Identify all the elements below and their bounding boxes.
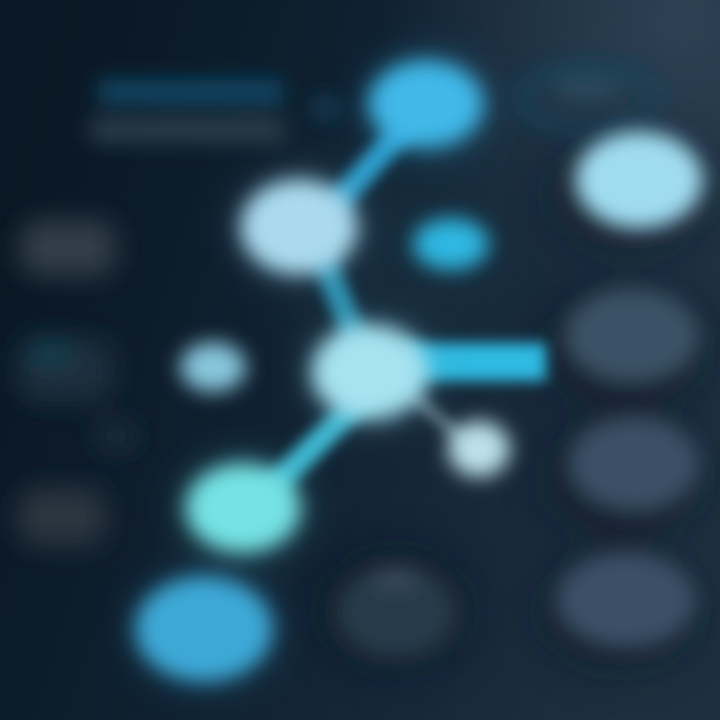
card shadows	[323, 141, 710, 666]
left small mark	[94, 423, 138, 449]
glow lower	[188, 466, 298, 550]
label ring	[522, 68, 654, 128]
connector center to right bar	[400, 343, 546, 381]
shadow 2	[547, 426, 703, 534]
glow top	[371, 62, 481, 146]
node left small	[180, 342, 246, 392]
left column cards	[18, 220, 138, 546]
shadow 5	[550, 141, 710, 249]
shadow 4	[323, 554, 467, 666]
small heading dot	[311, 96, 339, 120]
bottom center card label	[372, 566, 420, 590]
connector top node to upper node	[335, 110, 420, 205]
shadow 3	[542, 558, 698, 666]
connectors	[260, 110, 546, 500]
node small right pale	[448, 421, 510, 477]
left card 3	[18, 488, 106, 546]
left card 1	[20, 220, 116, 276]
right card 3	[556, 552, 696, 648]
node glows	[138, 62, 481, 679]
heading bar	[98, 80, 283, 104]
connector center to small node	[400, 385, 470, 445]
top right outlined label	[522, 68, 654, 128]
label text block	[552, 76, 620, 100]
right card 2	[568, 416, 700, 512]
node top blue	[369, 61, 483, 147]
subheading bar	[90, 118, 285, 142]
left card 2	[18, 338, 114, 402]
glow center	[315, 328, 425, 416]
node top right pale	[575, 131, 703, 229]
node upper pale	[241, 180, 357, 274]
node bottom blue	[136, 577, 272, 681]
right column cards	[336, 288, 700, 658]
nodes	[136, 61, 703, 681]
connector upper node to center	[320, 250, 360, 350]
right card 1	[564, 288, 700, 384]
node center	[312, 325, 428, 419]
shadow 1	[547, 298, 703, 406]
node lower teal	[186, 464, 300, 552]
connector center to lower node	[260, 395, 365, 500]
heading placeholder	[90, 80, 339, 142]
bottom center card	[336, 566, 456, 658]
glow upper	[244, 183, 354, 271]
node small cyan	[413, 218, 489, 270]
left card 2 accent	[24, 338, 76, 366]
glow bottom	[138, 579, 270, 679]
